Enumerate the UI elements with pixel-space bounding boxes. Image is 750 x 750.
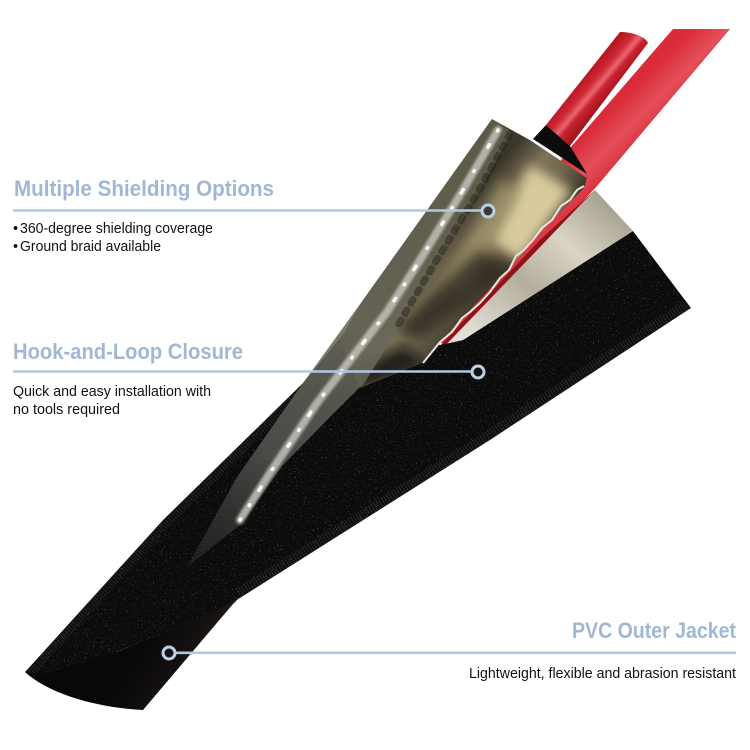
black inner sleeve end <box>533 125 587 174</box>
red flat cable <box>430 29 730 345</box>
leader line and marker <box>13 205 494 217</box>
black hook-and-loop flap <box>20 225 700 695</box>
description: no tools required <box>13 402 120 418</box>
callout: PVC outer jacket <box>163 618 737 682</box>
bullet list: Ground braid available <box>20 239 161 255</box>
description: Lightweight, flexible and abrasion resistant <box>469 666 736 682</box>
bullet list: • <box>13 239 18 255</box>
translucent shield section <box>187 119 512 567</box>
leader line and marker <box>163 647 736 659</box>
description: Quick and easy installation with <box>13 384 211 400</box>
callout: multiple shielding options <box>13 176 494 255</box>
foil weld seam <box>240 130 510 520</box>
ragged foil edge <box>423 186 584 363</box>
bullet list: • <box>13 221 18 237</box>
dark red cable underside <box>436 190 595 350</box>
silver foil flap <box>445 190 633 346</box>
bullet list: 360-degree shielding coverage <box>20 221 213 237</box>
heading: hook-and-loop closure: Hook-and-Loop Closure <box>13 339 243 364</box>
callout: hook-and-loop closure <box>13 339 484 418</box>
leader line and marker <box>13 366 484 378</box>
metallic foil shield <box>340 119 587 390</box>
red round cable <box>546 32 648 146</box>
heading: multiple shielding options: Multiple Shielding Options <box>14 176 274 201</box>
black PVC outer jacket <box>25 597 240 710</box>
